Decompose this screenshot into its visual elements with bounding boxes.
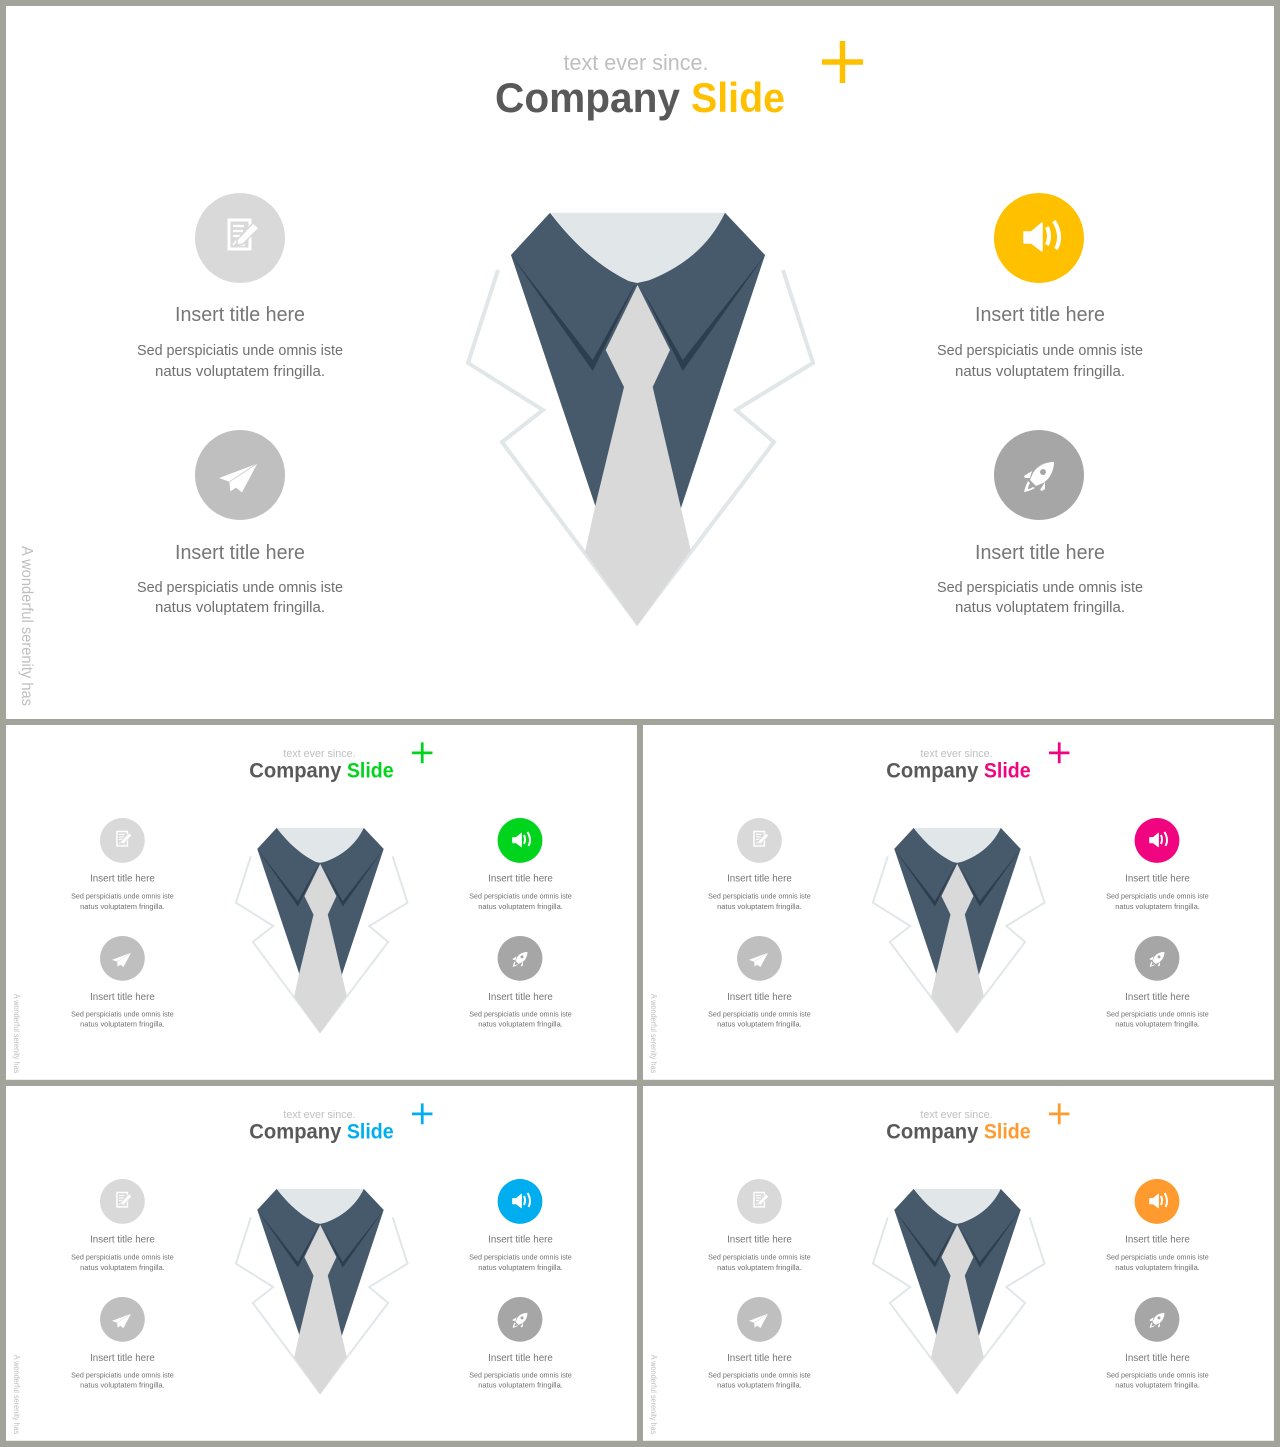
icon: note	[754, 831, 769, 846]
block: speaker	[1106, 1179, 1209, 1272]
vertical caption: A wonderful serenity has	[12, 994, 21, 1073]
title: text ever since.	[920, 748, 993, 760]
icon: note	[229, 220, 259, 249]
block: rocket: natus voluptatem fringilla.	[955, 599, 1125, 616]
block: note: natus voluptatem fringilla.	[80, 1263, 165, 1272]
block: speaker: natus voluptatem fringilla.	[955, 363, 1125, 380]
block: rocket: natus voluptatem fringilla.	[1115, 1381, 1200, 1390]
block: plane	[708, 936, 811, 1029]
block: plane: natus voluptatem fringilla.	[80, 1020, 165, 1029]
icon: rocket	[1024, 462, 1054, 492]
block: rocket: Insert title here	[488, 1353, 553, 1364]
icon: plane	[111, 1313, 131, 1328]
block: plane: Sed perspiciatis unde omnis iste	[708, 1010, 811, 1019]
block: note: Sed perspiciatis unde omnis iste	[71, 1253, 174, 1262]
block: note: Sed perspiciatis unde omnis iste	[708, 1253, 811, 1262]
block: rocket	[469, 936, 572, 1029]
block: speaker: natus voluptatem fringilla.	[1115, 1263, 1200, 1272]
block: plane: natus voluptatem fringilla.	[717, 1020, 802, 1029]
illustration: suit and tie	[236, 828, 408, 1034]
icon: note	[754, 1192, 769, 1207]
block: note: Insert title here	[90, 874, 155, 885]
panel: slide pink	[643, 725, 1274, 1080]
block: note: Insert title here	[727, 874, 792, 885]
block: plane: Insert title here	[727, 992, 792, 1003]
block: note: natus voluptatem fringilla.	[155, 363, 325, 380]
block: note: natus voluptatem fringilla.	[717, 1263, 802, 1272]
block: note: Sed perspiciatis unde omnis iste	[708, 892, 811, 901]
block: speaker: Insert title here	[975, 304, 1105, 326]
illustration: suit and tie	[873, 828, 1045, 1034]
icon: plane	[218, 463, 258, 493]
block: speaker: Sed perspiciatis unde omnis iste	[469, 1253, 572, 1262]
block: rocket: natus voluptatem fringilla.	[1115, 1020, 1200, 1029]
block: plane: natus voluptatem fringilla.	[717, 1381, 802, 1390]
block: rocket: natus voluptatem fringilla.	[478, 1381, 563, 1390]
illustration: suit and tie	[236, 1189, 408, 1395]
block: plane: Sed perspiciatis unde omnis iste	[71, 1010, 174, 1019]
title	[886, 1109, 1031, 1144]
title: text ever since.	[920, 1109, 993, 1121]
icon: plus	[412, 1103, 432, 1124]
block: speaker: Insert title here	[1125, 1235, 1190, 1246]
block: note: Insert title here	[90, 1235, 155, 1246]
title: Slide	[347, 1121, 394, 1144]
title: Company	[249, 1121, 342, 1144]
block: note: Sed perspiciatis unde omnis iste	[137, 342, 343, 359]
icon: rocket	[1150, 952, 1164, 967]
block: speaker: Sed perspiciatis unde omnis iste	[469, 892, 572, 901]
block: rocket	[937, 430, 1143, 616]
title: Company	[886, 760, 979, 783]
title: Slide	[691, 74, 785, 121]
icon: plane	[748, 952, 768, 967]
block: plane	[71, 1297, 174, 1390]
icon: plus	[412, 742, 432, 763]
block: rocket: Insert title here	[1125, 992, 1190, 1003]
block: rocket	[1106, 1297, 1209, 1390]
vertical caption: A wonderful serenity has	[18, 546, 35, 706]
block: plane: Insert title here	[175, 542, 305, 564]
block: note	[137, 193, 343, 380]
block: rocket: Insert title here	[1125, 1353, 1190, 1364]
block: rocket: Sed perspiciatis unde omnis iste	[1106, 1010, 1209, 1019]
icon: note	[117, 1192, 132, 1207]
icon: plus	[1049, 1103, 1069, 1124]
block: plane: Sed perspiciatis unde omnis iste	[708, 1371, 811, 1380]
block: note: Insert title here	[175, 304, 305, 326]
vertical caption: A wonderful serenity has	[649, 1355, 658, 1434]
block: speaker: natus voluptatem fringilla.	[478, 1263, 563, 1272]
block: note	[708, 818, 811, 911]
vertical caption: A wonderful serenity has	[649, 994, 658, 1073]
illustration: suit and tie	[468, 213, 813, 626]
icon: plane	[111, 952, 131, 967]
vertical caption: A wonderful serenity has	[12, 1355, 21, 1434]
block: note	[71, 1179, 174, 1272]
panel: main slide yellow	[6, 6, 1274, 719]
block: speaker: Insert title here	[488, 1235, 553, 1246]
block: plane	[71, 936, 174, 1029]
block: note: Sed perspiciatis unde omnis iste	[71, 892, 174, 901]
title	[886, 748, 1031, 783]
title: Company	[886, 1121, 979, 1144]
block: speaker	[1106, 818, 1209, 911]
title: Slide	[347, 760, 394, 783]
icon: plane	[748, 1313, 768, 1328]
block: speaker: Sed perspiciatis unde omnis iste	[937, 342, 1143, 359]
block: plane	[708, 1297, 811, 1390]
block: speaker: Sed perspiciatis unde omnis iste	[1106, 892, 1209, 901]
title	[249, 748, 394, 783]
block: rocket: natus voluptatem fringilla.	[478, 1020, 563, 1029]
title: Company	[249, 760, 342, 783]
icon: rocket	[513, 952, 527, 967]
illustration: suit and tie	[873, 1189, 1045, 1395]
title: text ever since.	[564, 50, 708, 75]
panel: slide green	[6, 725, 637, 1080]
block: speaker	[469, 818, 572, 911]
block: plane: Insert title here	[727, 1353, 792, 1364]
block: speaker: Insert title here	[488, 874, 553, 885]
block: rocket: Sed perspiciatis unde omnis iste	[469, 1010, 572, 1019]
block: speaker: natus voluptatem fringilla.	[1115, 902, 1200, 911]
block: note	[708, 1179, 811, 1272]
block: rocket	[469, 1297, 572, 1390]
title: Slide	[984, 760, 1031, 783]
block: note: natus voluptatem fringilla.	[717, 902, 802, 911]
title: Company	[495, 74, 681, 121]
block: plane: Insert title here	[90, 1353, 155, 1364]
block: speaker	[937, 193, 1143, 380]
icon: speaker	[1150, 1193, 1167, 1208]
title: Slide	[984, 1121, 1031, 1144]
icon: plus	[1049, 742, 1069, 763]
icon: speaker	[513, 832, 530, 847]
block: plane: Sed perspiciatis unde omnis iste	[71, 1371, 174, 1380]
panel: slide blue	[6, 1086, 637, 1441]
block: speaker	[469, 1179, 572, 1272]
block: speaker: Insert title here	[1125, 874, 1190, 885]
icon: rocket	[513, 1313, 527, 1328]
icon: speaker	[1024, 221, 1059, 251]
block: note: Insert title here	[727, 1235, 792, 1246]
icon: speaker	[1150, 832, 1167, 847]
title	[495, 50, 785, 121]
block: plane: natus voluptatem fringilla.	[155, 599, 325, 616]
title: text ever since.	[283, 748, 356, 760]
title: text ever since.	[283, 1109, 356, 1121]
block: note: natus voluptatem fringilla.	[80, 902, 165, 911]
title	[249, 1109, 394, 1144]
block: plane: natus voluptatem fringilla.	[80, 1381, 165, 1390]
block: plane: Insert title here	[90, 992, 155, 1003]
block: speaker: natus voluptatem fringilla.	[478, 902, 563, 911]
block: rocket: Insert title here	[488, 992, 553, 1003]
icon: plus	[822, 41, 863, 83]
panel: slide orange	[643, 1086, 1274, 1441]
icon: speaker	[513, 1193, 530, 1208]
block: rocket: Sed perspiciatis unde omnis iste	[937, 579, 1143, 596]
icon: rocket	[1150, 1313, 1164, 1328]
block: rocket	[1106, 936, 1209, 1029]
block: note	[71, 818, 174, 911]
icon: note	[117, 831, 132, 846]
block: rocket: Insert title here	[975, 542, 1105, 564]
block: rocket: Sed perspiciatis unde omnis iste	[469, 1371, 572, 1380]
block: plane	[137, 430, 343, 616]
block: rocket: Sed perspiciatis unde omnis iste	[1106, 1371, 1209, 1380]
block: plane: Sed perspiciatis unde omnis iste	[137, 579, 343, 596]
block: speaker: Sed perspiciatis unde omnis iste	[1106, 1253, 1209, 1262]
